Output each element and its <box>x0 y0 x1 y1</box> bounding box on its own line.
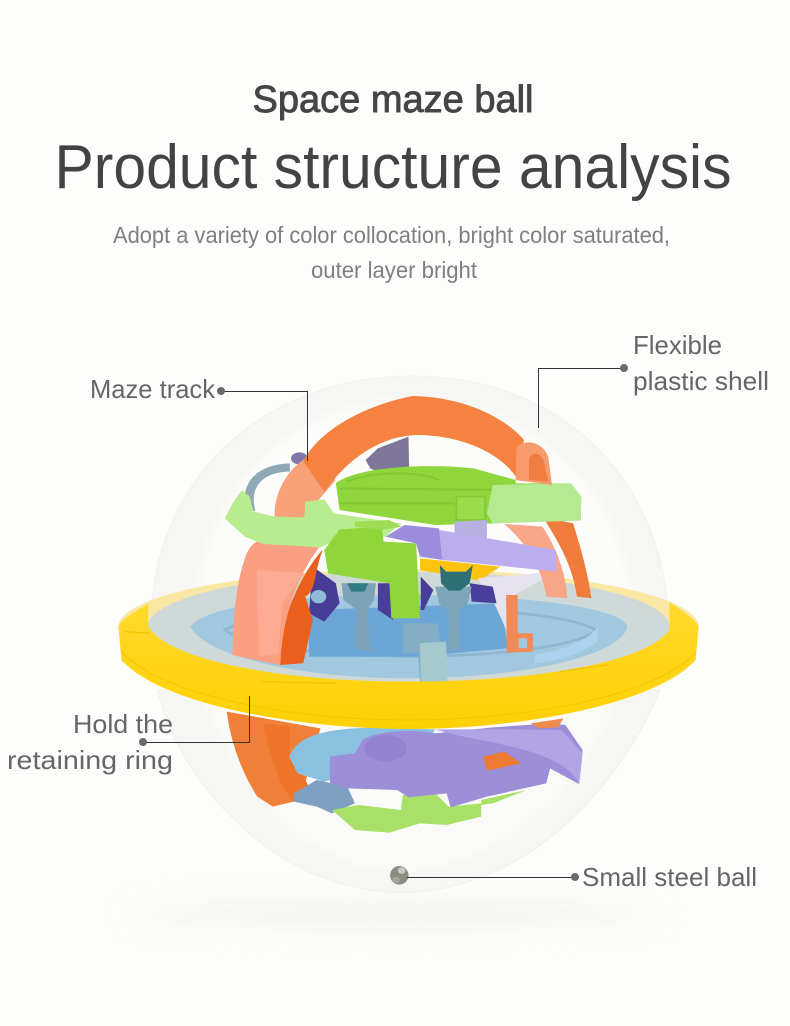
callout: small steel ball <box>407 862 757 892</box>
purple light track <box>439 530 557 572</box>
grey purple post <box>366 437 409 478</box>
intro text <box>113 222 670 283</box>
orange arch main <box>303 396 524 492</box>
bracket window <box>519 638 527 648</box>
lower transparent shell <box>158 690 660 892</box>
leader line <box>538 368 624 428</box>
heading: product name: Space maze ball <box>252 79 534 121</box>
steel ball <box>390 866 409 885</box>
left dark orange inner <box>280 549 323 665</box>
orange inner piece <box>483 752 521 771</box>
see-through gap <box>351 791 402 809</box>
yellow behind purple <box>420 558 500 581</box>
dot <box>571 873 579 881</box>
maze post left <box>342 583 376 650</box>
ring back rim <box>118 569 699 684</box>
label: Small steel ball <box>582 862 757 892</box>
blue maze disc <box>190 595 627 678</box>
label <box>633 330 769 396</box>
dome inner highlight <box>194 398 634 610</box>
purple knob at top left <box>291 452 308 464</box>
pale green band <box>225 490 401 547</box>
green pale right end <box>487 483 581 523</box>
left pale salmon arch lower <box>232 540 322 665</box>
heading: main title: Product structure analysis <box>54 133 732 202</box>
dark purple rear part right <box>470 583 497 603</box>
purple wheel hole <box>311 590 326 603</box>
yellow ring front <box>118 602 699 729</box>
pale translucent wedge <box>477 572 556 633</box>
centre maze block <box>403 623 447 682</box>
leader line <box>407 876 575 878</box>
lower orange highlight <box>263 723 309 802</box>
label: Flexible <box>633 330 722 360</box>
centre maze block light <box>420 642 448 682</box>
dark teal post tip right <box>440 565 473 591</box>
callout: maze track <box>90 374 308 461</box>
label: plastic shell <box>633 366 769 396</box>
dark purple rear part centre <box>378 583 393 620</box>
bright green L block <box>324 527 420 618</box>
green square clip <box>456 497 485 520</box>
left orange pale arch upper <box>275 458 336 518</box>
leader line <box>220 392 308 461</box>
label <box>7 709 173 775</box>
maze groove rings <box>225 609 596 656</box>
dot <box>217 387 225 395</box>
light purple toothed arc <box>435 729 583 784</box>
leader line <box>143 696 250 742</box>
green far piece <box>481 790 527 805</box>
upper dome and ring <box>118 376 699 729</box>
dark purple rear part near block <box>421 577 433 610</box>
lower light blue maze <box>289 727 435 782</box>
back right orange leg pale <box>504 524 567 598</box>
blue centre of the maze <box>309 603 508 657</box>
dark teal post tip left <box>347 583 368 592</box>
lower orange track <box>227 712 320 807</box>
upper transparent dome <box>151 376 668 610</box>
lower grey blue joint <box>294 780 355 813</box>
label: Hold the <box>73 709 173 739</box>
intro text: outer layer bright <box>311 257 478 283</box>
purple round boss <box>364 735 407 762</box>
label: retaining ring <box>7 745 173 775</box>
label: Maze track <box>90 374 216 404</box>
purple main plate <box>330 723 583 807</box>
green fin <box>355 520 402 530</box>
dot <box>620 364 628 372</box>
back right orange leg <box>542 517 591 598</box>
ring tabs <box>125 632 608 683</box>
lilac post <box>454 520 487 541</box>
dot <box>139 738 147 746</box>
pale blue right arc <box>535 627 598 663</box>
maze post right <box>435 587 472 650</box>
grey blue loop <box>249 467 290 512</box>
floor of the ring <box>148 572 670 682</box>
dark purple rear parts <box>309 567 340 622</box>
green bottom piece <box>332 793 481 833</box>
lower shell inner highlight <box>202 690 619 873</box>
ground shadow <box>130 901 660 927</box>
orange arch cap slot <box>529 454 548 482</box>
salmon lighter streak <box>257 570 305 657</box>
orange arch end cap <box>516 442 552 485</box>
lower shell and lower maze <box>158 690 660 892</box>
ring seam line <box>121 652 696 720</box>
green swirl grooves <box>340 473 512 503</box>
callout: retaining ring <box>7 696 250 775</box>
green upper plate <box>336 466 581 525</box>
small orange bracket <box>506 595 533 653</box>
orange rear stub <box>531 718 563 728</box>
purple dark left part <box>386 525 443 560</box>
maze ball product <box>118 376 699 892</box>
callout: flexible plastic shell <box>538 330 769 428</box>
intro text: Adopt a variety of color collocation, bright color saturated, <box>113 222 670 248</box>
